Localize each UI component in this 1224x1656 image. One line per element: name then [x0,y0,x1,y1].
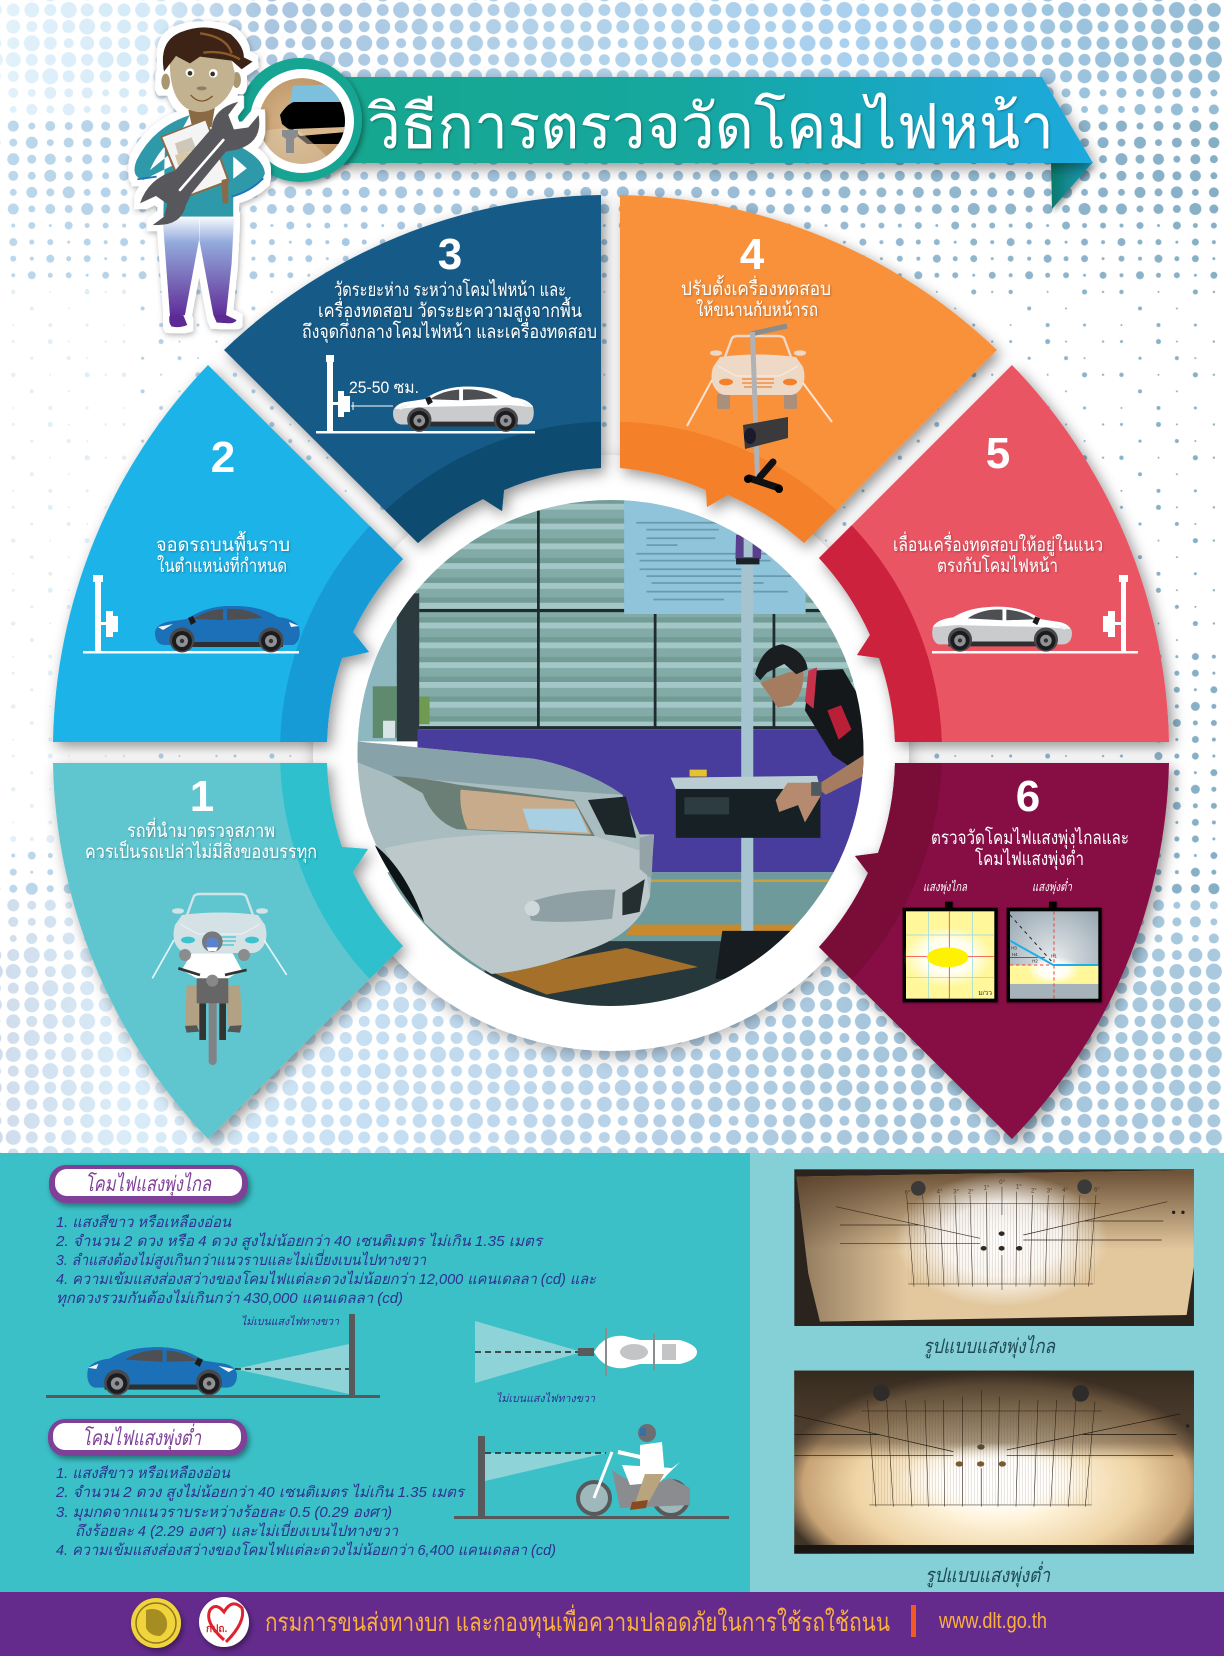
high beam list: 1. แสงสีขาว หรือเหลืองอ่อน [56,1214,232,1231]
caption: low beam pattern: รูปแบบแสงพุ่งต่ำ [925,1561,1051,1588]
headlight [392,776,595,836]
label: high beam: แสงพุ่งไกล [923,879,968,895]
wedge 5 [818,365,1182,756]
illustration: tester, 25-50 cm distance and car: 25-50 ซม. [349,378,419,397]
tester box [671,776,820,790]
panel: step 6 [818,758,1182,1150]
diagram: motorcycle low beam against wall [454,1424,729,1519]
illustration: tester, 25-50 cm distance and car [316,355,535,434]
wedge 4 [614,191,1006,554]
step 6 text: ตรวจวัดโคมไฟแสงพุ่งไกลและ [931,826,1129,850]
step 4 text: ให้ขนานกับหน้ารถ [696,299,818,321]
photo: high beam pattern: 1° [1016,1185,1022,1191]
logo: road safety fund: กปถ. [206,1623,227,1635]
trousers [163,218,234,317]
tester pole [741,535,753,934]
diagram: motorcycle top view high beam: ไม่เบนแสงไฟทางขวา [496,1392,596,1405]
photo: high beam pattern: 3° [1047,1189,1053,1195]
panel: step 4 [614,191,1006,554]
dotted halftone background [0,0,1222,1153]
high beam list: 2. จำนวน 2 ดวง หรือ 4 ดวง สูงไม่น้อยกว่า 40 เซนติเมตร ไม่เกิน 1.35 เมตร [55,1232,544,1250]
heading pill: low beam: โคมไฟแสงพุ่งต่ำ [82,1423,202,1451]
step 1 text: รถที่นำมาตรวจสภาพ [127,817,275,842]
step 2 text [156,531,290,577]
high beam list: 4. ความเข้มแสงส่องสว่างของโคมไฟแต่ละดวงไม่น้อยกว่า 12,000 แคนเดลลา (cd) และ [56,1270,597,1288]
hand [175,150,203,166]
step 6 text [931,826,1129,871]
wedge 6 [818,758,1182,1150]
number 2: 2 [211,433,235,482]
mechanic [805,669,867,776]
louvered wall [358,500,862,731]
grille [588,797,636,838]
banner fold [1051,162,1093,209]
banner ribbon [300,77,1093,163]
diagram: motorcycle top view high beam [475,1321,697,1405]
step 1 text [85,817,317,864]
purple wall [417,729,880,872]
footer bar [0,1592,1224,1656]
chart: low beam pattern [1007,902,1102,1002]
number 4: 4 [740,230,765,279]
face [170,53,235,112]
step 5 text: เลื่อนเครื่องทดสอบให้อยู่ในแนว [893,531,1103,556]
high beam list: 3. ลำแสงต้องไม่สูงเกินกว่าแนวราบและไม่เบี่ยงเบนไปทางขวา [56,1249,427,1269]
fog lamp [526,890,616,922]
photo: high beam pattern: 1° [984,1185,990,1191]
panel: step 3 [223,191,614,554]
footer divider [911,1605,916,1637]
central photo: mechanic aiming headlight tester at car [358,500,864,1006]
ears [161,74,170,90]
illustration: blue car and tester [83,575,300,654]
low beam list: 2. จำนวน 2 ดวง สูงไม่น้อยกว่า 40 เซนติเมตร ไม่เกิน 1.35 เมตร [55,1483,466,1501]
low beam list: ถึงร้อยละ 4 (2.29 องศา) และไม่เบี่ยงเบนไปทางขวา [75,1520,399,1540]
label: low beam: แสงพุ่งต่ำ [1032,878,1073,895]
heading pill: low beam [48,1419,247,1456]
photo: high beam pattern [794,1169,1194,1326]
floor [387,872,834,1006]
diagram: car high beam against wall [46,1314,380,1398]
step 3 text [302,278,597,344]
step 5 text: ตรงกับโคมไฟหน้า [937,554,1058,577]
neck [188,107,215,127]
car body [357,741,654,974]
photo: high beam pattern: 6° [905,1191,911,1197]
illustration: car front with headlight tester [687,326,832,493]
tester base [715,931,795,979]
shirt [134,115,265,217]
step 6 text: โคมไฟแสงพุ่งต่ำ [975,845,1084,871]
footer organisation name: กรมการขนส่งทางบก และกองทุนเพื่อความปลอดภัยในการใช้รถใช้ถนน [265,1604,890,1638]
step 5 text [893,531,1103,577]
high beam list: ทุกดวงรวมกันต้องไม่เกินกว่า 430,000 แคนเดลลา (cd) [56,1289,403,1307]
low beam list [55,1465,556,1559]
step 3 text: ถึงจุดกึ่งกลางโคมไฟหน้า และเครื่องทดสอบ [302,318,597,344]
panel: step 2 [48,364,412,756]
caption: high beam pattern: รูปแบบแสงพุ่งไกล [923,1335,1056,1359]
step 1 text: ควรเป็นรถเปล่าไม่มีสิ่งของบรรทุก [85,838,317,864]
notice sign [624,490,806,614]
mechanic character with wrench [134,27,265,327]
chart: low beam pattern: H2 [1032,959,1038,964]
hair [163,27,253,72]
photo: low beam pattern [794,1371,1194,1554]
photo: high beam pattern: 4° [937,1189,943,1195]
wrench [140,102,259,225]
diagram: car high beam against wall: ไม่เบนแสงไฟทางขวา [241,1315,340,1328]
header badge: car headlight [238,58,362,182]
dark frames [397,593,419,741]
logo: road safety fund [199,1597,249,1647]
nose and smile [197,86,207,90]
photo: high beam pattern: 3° [953,1189,960,1195]
chart: low beam pattern: H1 [1051,953,1057,958]
heading pill: high beam: โคมไฟแสงพุ่งไกล [85,1172,212,1197]
panel: step 1 [48,758,412,1150]
chart: low beam pattern: H3 [1011,945,1017,950]
low beam list: 3. มุมกดจากแนวราบระหว่างร้อยละ 0.5 (0.29 องศา) [56,1504,392,1521]
photo: high beam pattern: 0° [999,1180,1006,1186]
wedge 1 [48,758,412,1150]
title text: วิธีการตรวจวัดโคมไฟหน้า [367,92,1054,162]
step 2 text: จอดรถบนพื้นราบ [156,531,290,556]
panel: high and low beam requirements [0,1153,750,1592]
illustration: silver car and tester [932,575,1138,654]
illustration: car and motorcycle rider from front [152,894,287,1065]
wedge 3 [223,191,614,554]
title banner [300,77,1093,209]
clipboard [160,118,230,198]
footer website: www.dlt.go.th [938,1608,1047,1633]
photo: high beam pattern: 4° [1062,1188,1069,1194]
chart: low beam pattern: H4 [1012,952,1018,957]
photo: high beam pattern: 2° [968,1189,974,1195]
high beam list [55,1214,597,1307]
chart: high beam pattern [903,902,998,1002]
panel: beam pattern photos [750,1153,1224,1592]
panel: step 5 [818,365,1182,756]
heading pill: high beam [49,1165,248,1203]
chart: high beam pattern: ม/วว [978,990,992,997]
photo: high beam pattern: 2° [1031,1189,1037,1195]
logo: department of land transport seal [131,1598,181,1648]
shoes [169,315,237,327]
number 1: 1 [190,772,214,821]
photo: high beam pattern: 6° [1094,1188,1100,1194]
number 6: 6 [1016,772,1040,821]
central white disc [313,455,909,1054]
number 3: 3 [438,230,462,279]
low beam list: 1. แสงสีขาว หรือเหลืองอ่อน [56,1465,231,1482]
step 4 text: ปรับตั้งเครื่องทดสอบ [681,275,831,300]
step 4 text [681,275,831,321]
step 3 text: วัดระยะห่าง ระหว่างโคมไฟหน้า และ [334,278,566,301]
step 3 text: เครื่องทดสอบ วัดระยะความสูงจากพื้น [318,297,582,322]
left building opening [358,618,397,742]
wedge 2 [48,364,412,756]
low beam list: 4. ความเข้มแสงส่องสว่างของโคมไฟแต่ละดวงไม่น้อยกว่า 6,400 แคนเดลลา (cd) [56,1541,556,1559]
step 2 text: ในตำแหน่งที่กำหนด [157,552,287,577]
eyes [186,68,194,77]
number 5: 5 [986,429,1010,478]
